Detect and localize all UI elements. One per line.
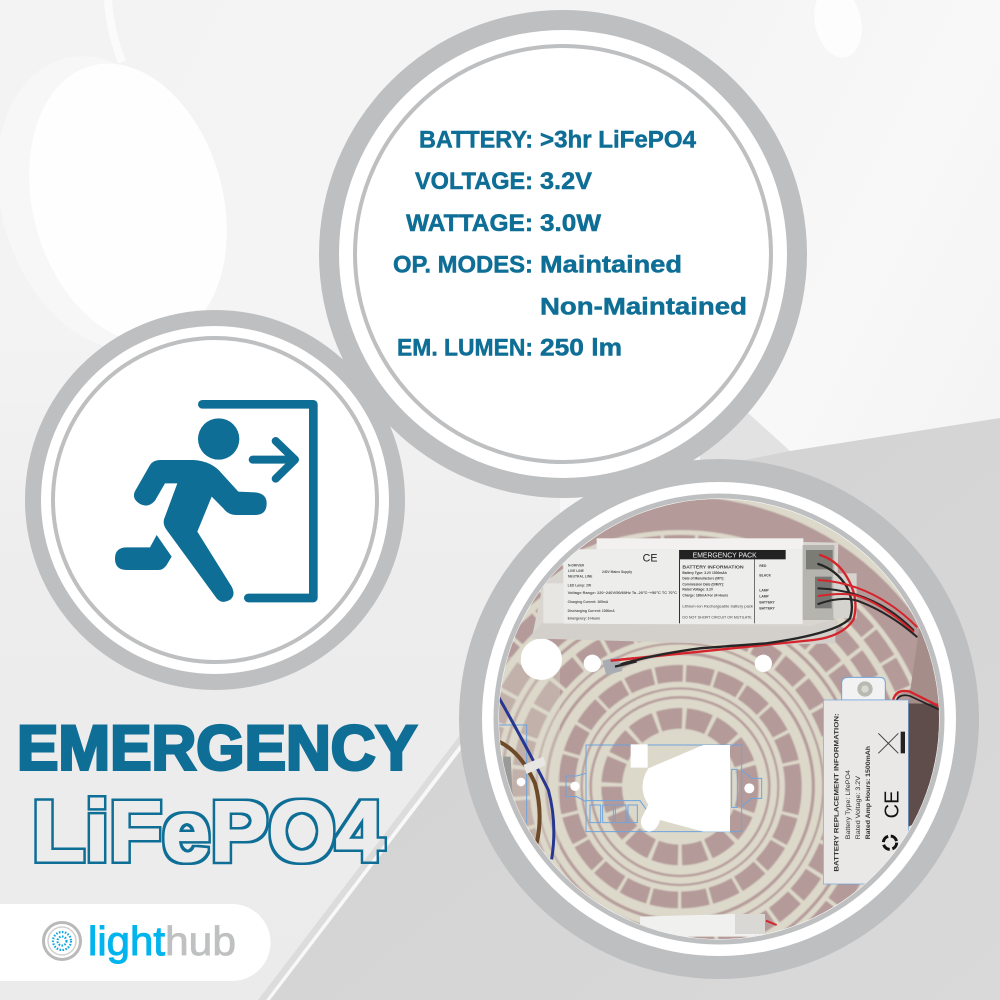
title: EMERGENCY: EMERGENCY [17, 714, 417, 784]
spec values: Non-Maintained [540, 294, 747, 320]
photo: emergency pack wiring: DO NOT SHORT CIRCUIT OR MUTILATE [682, 616, 753, 620]
photo: emergency pack wiring: BATTERY INFORMATION [682, 565, 744, 571]
metal bracket left [503, 756, 512, 794]
lamp photo: wall light top left [0, 0, 257, 377]
battery label text: Battery Type: LifePO4 [846, 769, 852, 839]
icon: running person through exit door [115, 404, 313, 602]
spec values: Maintained [540, 252, 682, 278]
logo pill [0, 904, 270, 981]
blue and brown wires [497, 741, 540, 843]
spec labels: BATTERY: [419, 126, 533, 154]
driver label text: LED Lamp: 2W [568, 583, 592, 587]
driver label text: LIVE LINE [568, 569, 585, 573]
driver label text: N-DRIVER [568, 563, 585, 567]
photo: emergency pack wiring: RED [759, 564, 767, 568]
photo: emergency pack wiring: Charge: 180mA For 24 Hours [682, 593, 728, 597]
logo pill: hub [165, 918, 236, 964]
photo: emergency pack wiring: Commission Date (D/M/Y): [682, 582, 724, 586]
bottom white housing [640, 914, 765, 937]
spec values: 3.2V [540, 168, 592, 195]
badge: exit icon circle [25, 310, 405, 690]
dark recess behind battery [908, 703, 939, 826]
spec labels [393, 126, 533, 362]
panel: specifications circle [319, 10, 807, 498]
terminal block [803, 545, 834, 620]
driver label text [568, 563, 678, 620]
driver label text: Discharging Current: 1000mA [568, 609, 615, 613]
spec labels: VOLTAGE: [415, 168, 533, 195]
spec values: 250 lm [540, 334, 622, 362]
driver label text: NEUTRAL LINE [568, 575, 593, 579]
battery label text: CE [881, 791, 903, 818]
spec labels: OP. MODES: [393, 252, 533, 278]
battery pack [823, 700, 908, 884]
centre cut-out [631, 744, 730, 832]
blue outline guide [497, 725, 762, 832]
driver label text: Emergency: 3 Hours [568, 616, 600, 620]
photo: emergency pack wiring: Battery Type: 3.2V 1500mAh [682, 571, 727, 575]
lamp photo: ceiling light top right [808, 0, 868, 62]
driver label text: Charging Current: 165mA [568, 600, 609, 604]
photo: emergency pack wiring: LAMP [759, 595, 770, 599]
photo: emergency pack wiring: LAMP [759, 589, 770, 593]
driver label text: Voltage Range: 220~240V/50/60Hz Ta -20°C~+50°C TC 70°C [568, 591, 678, 595]
panel: product photo circle [407, 459, 979, 982]
heat pattern rings [499, 499, 939, 939]
spec values [540, 126, 747, 362]
faded left side of pattern [499, 656, 560, 867]
spec labels: EM. LUMEN: [397, 334, 533, 362]
photo: emergency pack wiring [499, 499, 939, 939]
red and black wires [611, 555, 940, 710]
battery label text: Rated Amp Hours: 1500mAh [866, 746, 872, 839]
photo: emergency pack wiring: BLACK [759, 573, 772, 577]
mounting holes [521, 639, 772, 680]
photo: emergency pack wiring: CE [643, 553, 657, 565]
photo: emergency pack wiring: BATTERY [759, 601, 775, 605]
subtitle: LiFePO4 outlined: LiFePO4 [32, 784, 384, 880]
wire connector [602, 656, 622, 675]
battery label text: BATTERY REPLACEMENT INFORMATION: [834, 713, 841, 872]
photo: emergency pack wiring: EMERGENCY PACK [693, 552, 757, 559]
spec values: >3hr LiFePO4 [540, 126, 697, 154]
photo: emergency pack wiring: BATTERY [759, 607, 775, 611]
battery label text: Rated Voltage: 3.2V [856, 776, 862, 839]
icon: lighthub logo mark [44, 922, 80, 960]
driver label text: 240V Mains Supply [602, 570, 632, 574]
battery bracket [842, 677, 885, 700]
spec values: 3.0W [540, 210, 601, 237]
driver body [532, 538, 838, 638]
photo: emergency pack wiring: Lithium-Ion Rechargeable battery pack [682, 605, 753, 609]
spec labels: WATTAGE: [406, 210, 533, 237]
photo: emergency pack wiring: Date of Manufacture (M/Y): [682, 577, 725, 581]
logo wordmark: light [88, 918, 166, 964]
battery label text [834, 713, 903, 872]
photo: emergency pack wiring: Rated Voltage: 3.2V [682, 588, 714, 592]
